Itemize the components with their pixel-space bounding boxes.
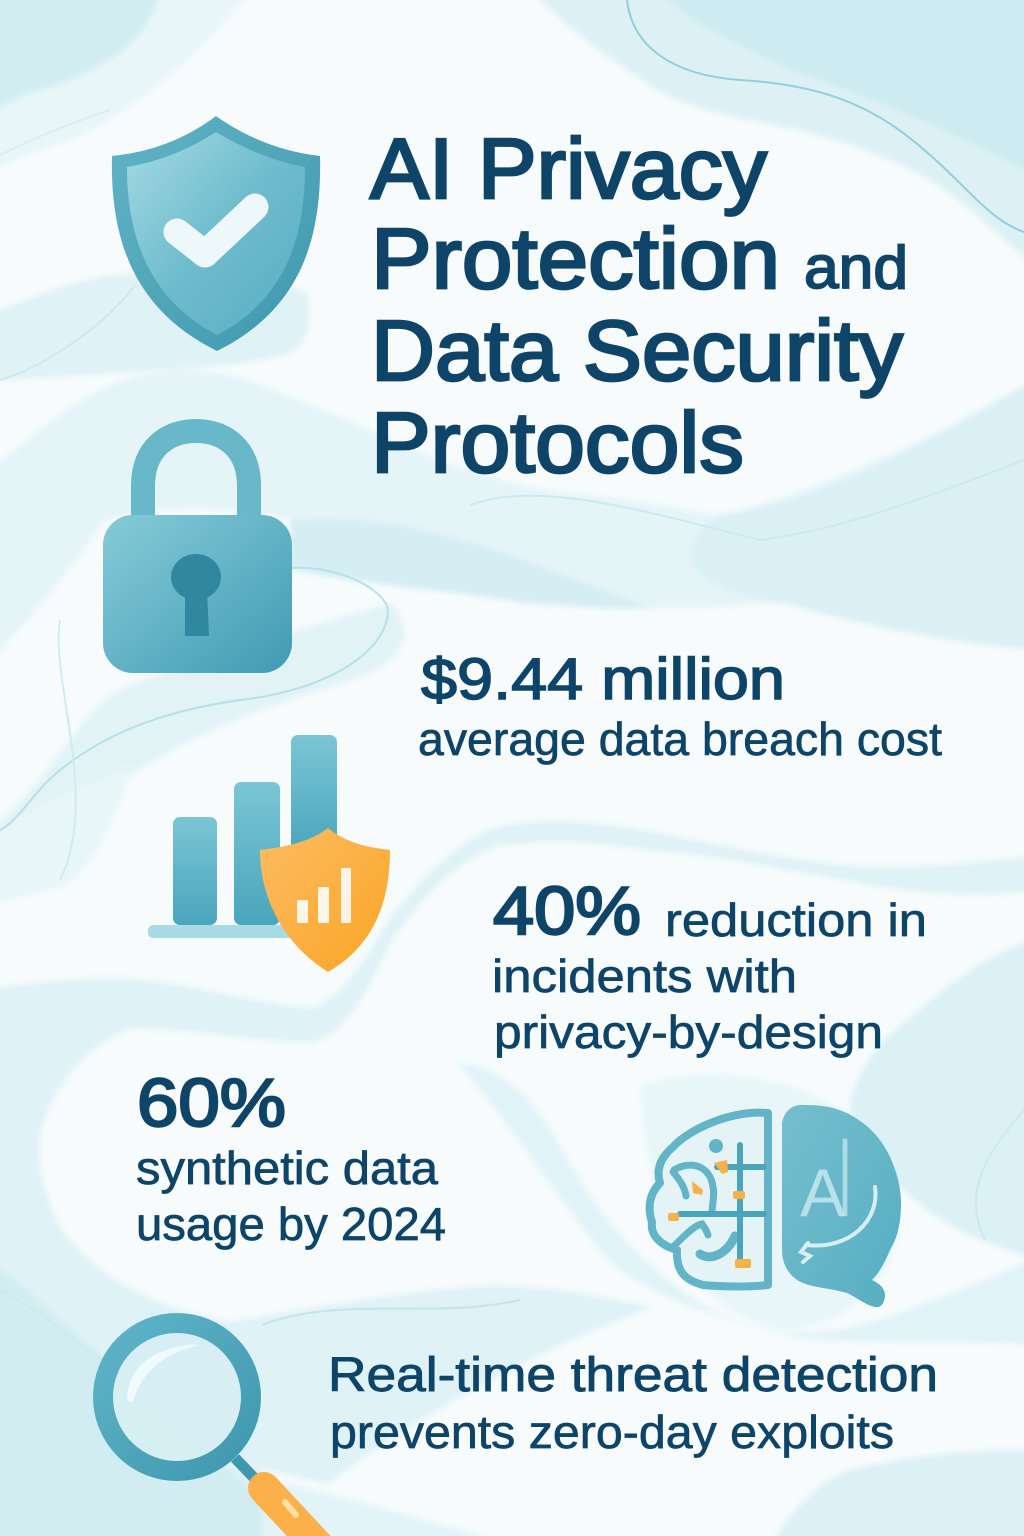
text: threat detection: Real-time threat detection — [328, 1349, 938, 1402]
icon: shield with checkmark — [112, 116, 320, 351]
title: and — [804, 234, 908, 301]
stat: data breach cost — [418, 647, 942, 765]
icon: bar chart with orange shield — [148, 735, 390, 972]
title: Protocols — [371, 396, 744, 491]
text: threat detection — [328, 1349, 938, 1458]
AI speech bubble: I — [838, 1115, 852, 1240]
orange shield — [260, 828, 390, 972]
brain half — [650, 1113, 768, 1286]
stat: synthetic data — [136, 1065, 446, 1250]
stat: synthetic data: synthetic data — [136, 1142, 438, 1194]
text: threat detection: prevents zero-day exploits — [330, 1406, 894, 1458]
stat: data breach cost: average data breach cost — [418, 713, 942, 765]
title: Data Security — [371, 304, 904, 399]
stat: data breach cost: $9.44 million — [421, 647, 785, 712]
icon: magnifying glass — [103, 1323, 345, 1536]
title — [370, 122, 908, 491]
icon: brain and AI speech bubble — [650, 1105, 901, 1307]
AI speech bubble — [782, 1105, 901, 1307]
AI speech bubble: A — [800, 1155, 846, 1231]
title: Protection — [371, 212, 780, 307]
stat: incident reduction: incidents with — [492, 950, 797, 1002]
stat: incident reduction — [492, 873, 927, 1058]
stat: synthetic data: 60% — [137, 1065, 286, 1141]
icon: padlock — [103, 431, 292, 673]
stat: synthetic data: usage by 2024 — [136, 1198, 446, 1250]
stat: incident reduction: reduction in — [665, 894, 927, 946]
stat: incident reduction: 40% — [493, 873, 641, 949]
stat: incident reduction: privacy-by-design — [494, 1006, 883, 1058]
title: AI Privacy — [370, 122, 768, 217]
